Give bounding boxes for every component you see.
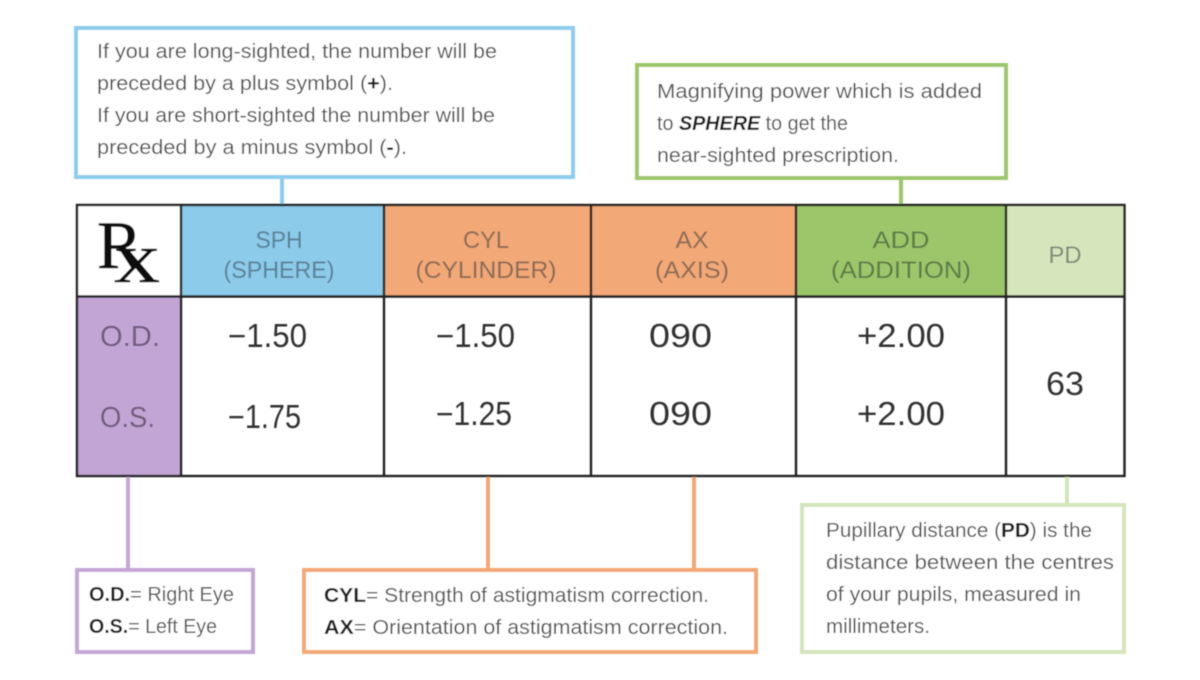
values: AX: 090 [649,395,712,432]
header cell: Rx symbol [76,205,181,298]
values: ADD [857,317,945,432]
header cell: SPH [181,205,384,296]
header cell: CYL: (CYLINDER) [416,257,556,284]
prescription table [76,205,1125,476]
table grid [77,205,1124,476]
values: SPH: −1.75 [228,398,301,435]
header cell: ADD: ADD [872,227,930,254]
values: AX [649,317,712,432]
callout: eye abbreviations: O.D.= Right Eye [89,584,234,606]
values: CYL: −1.25 [436,395,512,432]
callout: pupillary distance: Pupillary distance ( PD) is the [826,520,1092,542]
values: CYL [436,317,515,432]
callout: addition explanation: Magnifying power which is added [657,81,982,103]
header cell: PD: PD [1048,242,1082,269]
callout: cylinder and axis definitions: AX= Orientation of astigmatism correction. [324,617,728,639]
values: AX: 090 [649,317,712,354]
callout: sphere sign explanation: preceded by a plus symbol ( +). [97,73,393,95]
header cell: SPH: SPH [256,227,302,254]
header cell: CYL: CYL [463,227,509,254]
callout: addition explanation [637,65,1006,204]
header cell: PD [1006,205,1125,296]
callout: addition explanation: to SPHERE to get the [657,113,848,135]
callout: addition explanation: near-sighted prescription. [657,145,899,167]
header cell: Rx symbol: x [114,218,160,298]
callout: cylinder and axis definitions: CYL= Strength of astigmatism correction. [324,585,709,607]
callout: sphere sign explanation [76,28,573,204]
callout: pupillary distance: distance between the centres [826,552,1114,574]
callout: sphere sign explanation: preceded by a minus symbol ( -). [97,137,407,159]
header cell: AX: AX [676,227,708,254]
header cell: ADD [796,205,1006,296]
header cell: AX: (AXIS) [655,257,729,284]
row labels: O.D. and O.S. [76,296,181,476]
row labels: O.D. and O.S.: O.S. [100,402,155,434]
callout: eye abbreviations: O.S.= Left Eye [89,616,217,638]
header cell: Rx symbol: R [97,207,143,283]
values: CYL: −1.50 [436,317,515,354]
header cell: SPH: (SPHERE) [224,257,334,284]
callout: sphere sign explanation: If you are long-sighted, the number will be [97,41,497,63]
header cell: AX [591,205,796,296]
callout: sphere sign explanation: If you are short-sighted the number will be [97,105,495,127]
value: PD: 63 [1046,365,1084,402]
header cell: ADD: (ADDITION) [831,257,971,284]
callout: pupillary distance: millimeters. [826,616,930,638]
header cell: CYL [384,205,591,296]
values: SPH [228,317,307,435]
values: ADD: +2.00 [857,317,945,354]
callout: pupillary distance [802,477,1124,652]
callout: pupillary distance: of your pupils, measured in [826,584,1081,606]
callout: cylinder and axis definitions [304,477,756,652]
values: ADD: +2.00 [857,395,945,432]
callout: eye abbreviations [77,477,253,652]
values: SPH: −1.50 [228,317,307,354]
row labels: O.D. and O.S.: O.D. [100,321,160,353]
